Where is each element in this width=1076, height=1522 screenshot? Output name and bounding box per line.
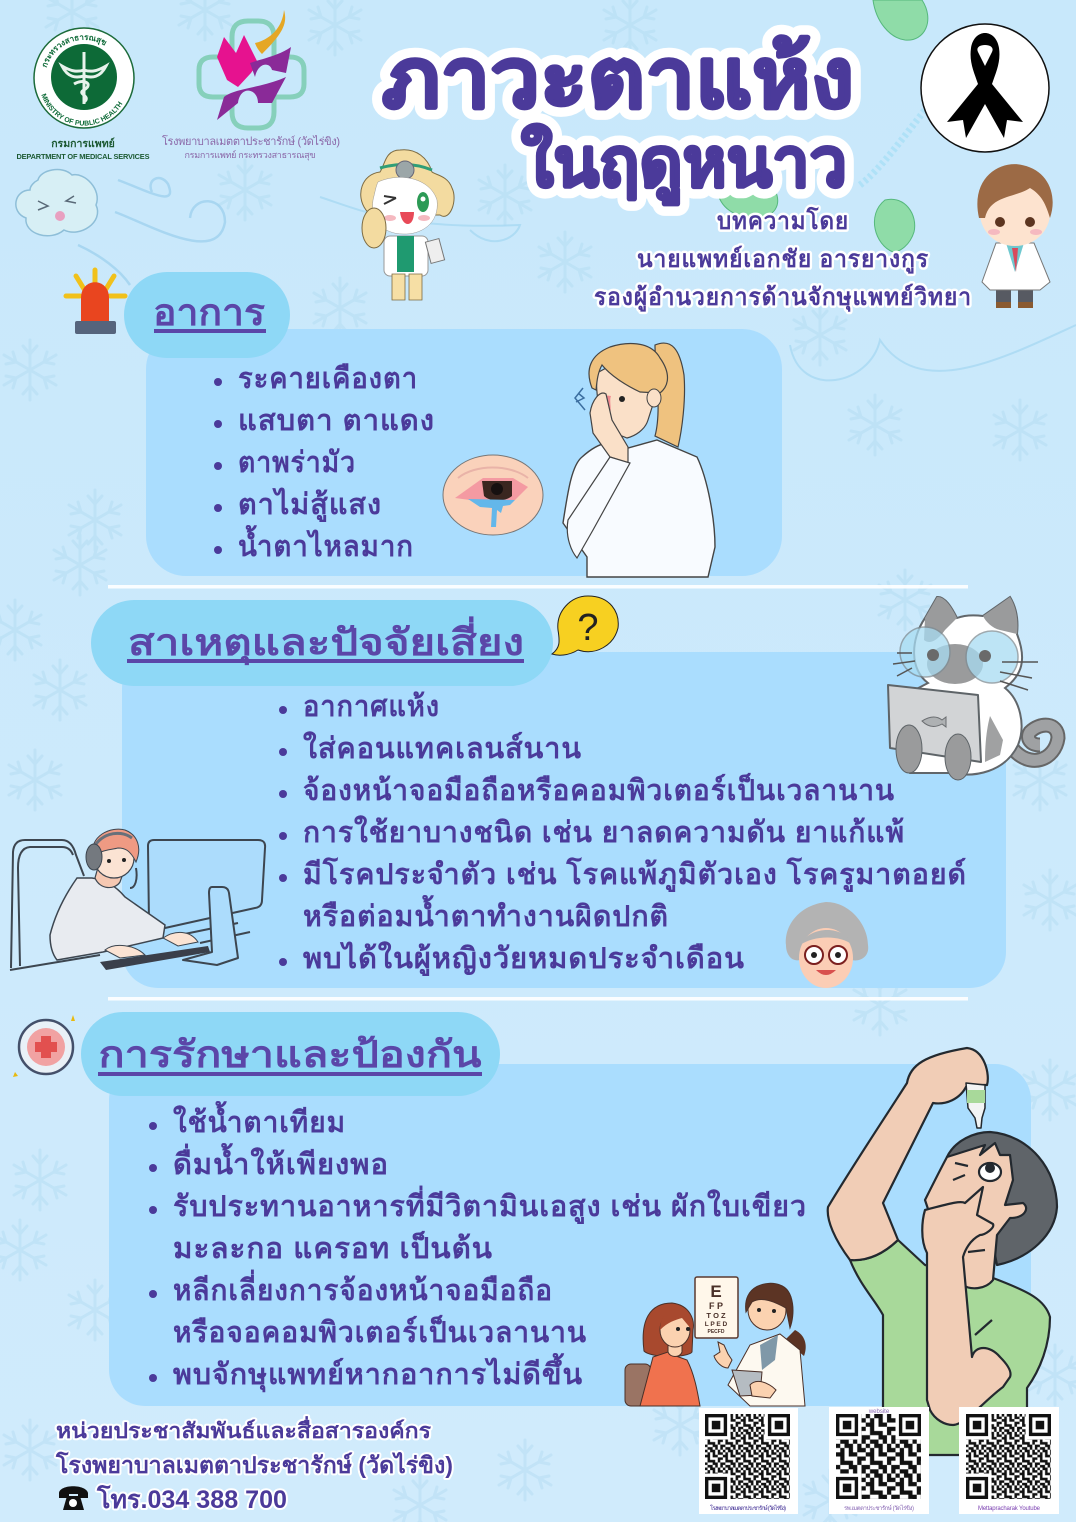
- list: symptoms: ตาพร่ามัว: [238, 447, 356, 479]
- icon: telephone: [59, 1486, 88, 1510]
- illustration: person at computer: [10, 829, 265, 970]
- illustration: man using eye drops: [828, 1048, 1057, 1455]
- divider: [108, 585, 968, 588]
- list: causes: การใช้ยาบางชนิด เช่น ยาลดความดัน ยาแก้แพ้: [303, 815, 905, 849]
- list: causes: [279, 691, 967, 976]
- logo: Ministry of Public Health: กระทรวงสาธารณสุข: [42, 35, 107, 68]
- heading: causes: [91, 600, 553, 686]
- illustration: eye exam: T O Z: [706, 1311, 726, 1320]
- list: treatment: ใช้น้ำตาเทียม: [173, 1100, 346, 1139]
- footer contact: หน่วยประชาสัมพันธ์และสื่อสารองค์กร: [56, 1415, 432, 1443]
- title: ภาวะตาแห้ง: [382, 31, 854, 125]
- list: causes: พบได้ในผู้หญิงวัยหมดประจำเดือน: [303, 941, 745, 976]
- panel: causes background: [122, 652, 1006, 988]
- footer contact: โทร.034 388 700: [96, 1484, 287, 1514]
- list: causes: ใส่คอนแทคเลนส์นาน: [303, 731, 582, 765]
- illustration: eye exam: [625, 1277, 806, 1406]
- footer contact: โรงพยาบาลเมตตาประชารักษ์ (วัดไร่ขิง): [55, 1451, 453, 1478]
- illustration: grandmother: [786, 902, 868, 988]
- illustration: eye exam: F P: [709, 1301, 723, 1311]
- byline: บทความโดย: [717, 206, 849, 235]
- heading: symptoms: [124, 272, 290, 358]
- title: ในฤดูหนาว: [521, 123, 847, 206]
- list: symptoms: แสบตา ตาแดง: [238, 405, 435, 437]
- logo caption: department: กรมการแพทย์: [51, 137, 115, 150]
- logo: Metta hospital: [199, 10, 304, 128]
- list: causes: จ้องหน้าจอมือถือหรือคอมพิวเตอร์เป็นเวลานาน: [303, 772, 895, 807]
- logo caption: department: [16, 137, 150, 161]
- icon: question bubble: ?: [577, 607, 599, 649]
- heading: symptoms: อาการ: [153, 292, 265, 333]
- icon: cold cloud face: [16, 170, 98, 236]
- list: causes: มีโรคประจำตัว เช่น โรคแพ้ภูมิตัวเอง โรครูมาตอยด์: [303, 856, 967, 892]
- icon: question bubble: [552, 596, 618, 655]
- panel: symptoms background: [146, 329, 782, 576]
- logo: Ministry of Public Health: MINISTRY OF PUBLIC HEALTH: [42, 93, 122, 126]
- list: treatment: พบจักษุแพทย์หากอาการไม่ดีขึ้น: [173, 1352, 583, 1392]
- list: symptoms: ระคายเคืองตา: [238, 363, 418, 395]
- list: symptoms: ตาไม่สู้แสง: [238, 487, 382, 522]
- QR code 2: website: [868, 1409, 890, 1415]
- QR code 1: [699, 1408, 798, 1514]
- QR code 3: Mettapracharak Youtube: [978, 1506, 1041, 1512]
- list: causes: หรือต่อมน้ำตาทำงานผิดปกติ: [303, 894, 669, 933]
- illustration: eye exam: L P E D: [705, 1321, 728, 1328]
- illustration: woman with sore eye: [563, 343, 715, 577]
- QR code 3: [959, 1407, 1059, 1514]
- heading: treatment: [81, 1012, 500, 1096]
- logo caption: Metta hospital: [162, 134, 340, 161]
- logo caption: Metta hospital: กรมการแพทย์ กระทรวงสาธารณสุข: [184, 149, 316, 161]
- QR code 1: โรงพยาบาลเมตตาประชารักษ์ (วัดไร่ขิง): [710, 1504, 786, 1512]
- illustration: red watery eye: [443, 455, 543, 535]
- panel: treatment background: [109, 1064, 1031, 1406]
- icon: medical cross target: [13, 1015, 75, 1077]
- illustration: doctor: [977, 164, 1053, 308]
- list: treatment: รับประทานอาหารที่มีวิตามินเอสูง เช่น ผักใบเขียว: [173, 1185, 807, 1224]
- icon: black ribbon circle: [921, 24, 1049, 152]
- list: symptoms: [214, 363, 435, 563]
- byline: [594, 206, 972, 313]
- illustration: cat with laptop: [888, 597, 1058, 780]
- QR code 2: [829, 1407, 929, 1514]
- divider: [108, 997, 968, 1000]
- list: treatment: หลีกเลี่ยงการจ้องหน้าจอมือถือ: [173, 1269, 553, 1307]
- list: symptoms: น้ำตาไหลมาก: [238, 524, 414, 563]
- list: treatment: [149, 1100, 807, 1392]
- logo caption: Metta hospital: โรงพยาบาลเมตตาประชารักษ์ (วัดไร่ขิง): [162, 134, 340, 148]
- logo: Ministry of Public Health: [33, 27, 135, 129]
- byline: รองผู้อำนวยการด้านจักษุแพทย์วิทยา: [594, 283, 972, 313]
- byline: นายแพทย์เอกชัย อารยางกูร: [637, 245, 929, 274]
- list: causes: อากาศแห้ง: [303, 691, 440, 723]
- title: ภาวะตาแห้ง: [382, 31, 854, 125]
- title: [382, 31, 854, 206]
- list: treatment: หรือจอคอมพิวเตอร์เป็นเวลานาน: [173, 1314, 587, 1349]
- title: ในฤดูหนาว: [521, 123, 847, 206]
- QR code 2: รพ.เมตตาประชารักษ์ (วัดไร่ขิง): [844, 1504, 914, 1512]
- leaves: [717, 0, 928, 252]
- mascot: [361, 150, 454, 300]
- illustration: eye exam: E: [710, 1282, 722, 1301]
- logo caption: department: DEPARTMENT OF MEDICAL SERVICES: [16, 152, 150, 161]
- heading: causes: สาเหตุและปัจจัยเสี่ยง: [128, 616, 524, 666]
- icon: siren: [66, 270, 125, 334]
- icon: wind swirls: [78, 178, 225, 285]
- heading: treatment: การรักษาและป้องกัน: [98, 1034, 482, 1075]
- list: treatment: มะละกอ แครอท เป็นต้น: [173, 1230, 493, 1265]
- illustration: eye exam: PECFD: [708, 1329, 725, 1335]
- footer contact: [55, 1415, 453, 1514]
- list: treatment: ดื่มน้ำให้เพียงพอ: [173, 1142, 389, 1181]
